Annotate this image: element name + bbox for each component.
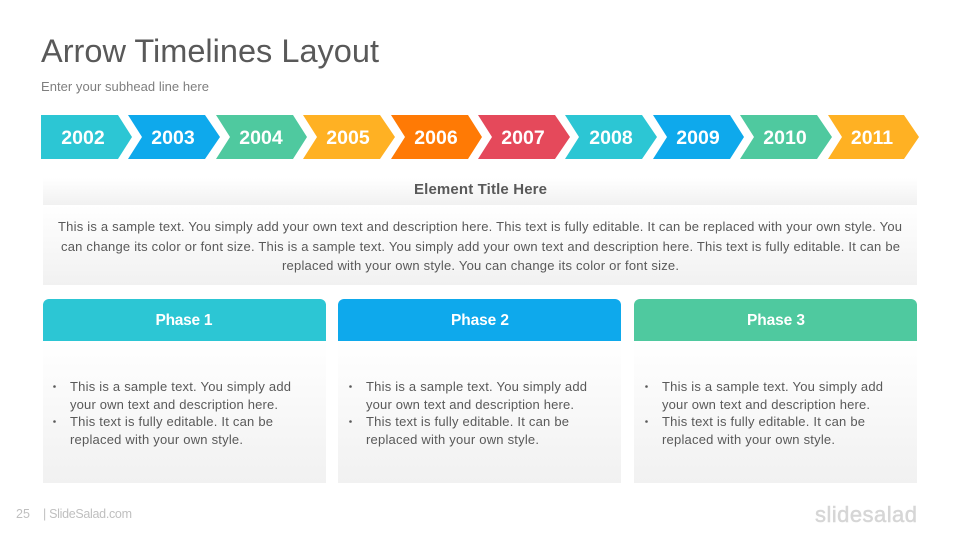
phase 1 body: This is a sample text. You simply add — [70, 379, 291, 394]
phase 1 body: replaced with your own style. — [70, 432, 243, 447]
phase 2 body: replaced with your own style. — [366, 432, 539, 447]
arrow: 2009: 2009 — [676, 127, 720, 149]
phase 2 header — [338, 299, 621, 341]
page number: 25 — [16, 507, 30, 521]
description text — [43, 205, 917, 285]
element title bar: Element Title Here — [414, 181, 547, 198]
phase 3 header — [634, 299, 917, 341]
arrow: 2005 — [303, 115, 395, 159]
phase 1 header: Phase 1 — [156, 312, 213, 329]
phase 1 body: This text is fully editable. It can be — [70, 414, 273, 429]
element title bar — [43, 178, 917, 205]
phase 2 body: your own text and description here. — [366, 397, 574, 412]
arrow: 2006: 2006 — [414, 127, 458, 149]
description text: replaced with your own style. You can change its color or font size. — [282, 258, 679, 273]
phase 2 body: This text is fully editable. It can be — [366, 414, 569, 429]
title: Arrow Timelines Layout — [41, 33, 379, 69]
footer source: | SlideSalad.com — [43, 507, 132, 521]
panel: phase 3 — [634, 299, 917, 483]
phase 3 header: Phase 3 — [747, 312, 805, 329]
phase 3 body: your own text and description here. — [662, 397, 870, 412]
phase 1 header — [43, 299, 326, 341]
phase 3 body: This text is fully editable. It can be — [662, 414, 865, 429]
arrow timeline — [41, 115, 919, 159]
arrow: 2007 — [478, 115, 570, 159]
phase 2 body — [338, 341, 621, 483]
panel: phase 2 — [338, 299, 621, 483]
arrow: 2004: 2004 — [239, 127, 283, 149]
arrow: 2008 — [565, 115, 657, 159]
phase 2 body: This is a sample text. You simply add — [366, 379, 587, 394]
phase 3 body: This is a sample text. You simply add — [662, 379, 883, 394]
phase 1 body — [43, 341, 326, 483]
arrow: 2009 — [653, 115, 744, 159]
arrow: 2005: 2005 — [326, 127, 370, 149]
description text: This is a sample text. You simply add your own text and description here. This text is fully editable. It can be replaced with your own style. You — [58, 219, 902, 234]
phase 1 body: your own text and description here. — [70, 397, 278, 412]
arrow: 2006 — [391, 115, 482, 159]
arrow: 2010: 2010 — [763, 127, 807, 149]
subhead: Enter your subhead line here — [41, 79, 209, 94]
arrow: 2011 — [828, 115, 919, 159]
phase 3 body — [634, 341, 917, 483]
arrow: 2007: 2007 — [501, 127, 545, 149]
arrow: 2010 — [740, 115, 832, 159]
arrow: 2011: 2011 — [851, 127, 893, 149]
arrow: 2003 — [128, 115, 220, 159]
arrow: 2003: 2003 — [151, 127, 195, 149]
arrow: 2002: 2002 — [61, 127, 105, 149]
phase 3 body: replaced with your own style. — [662, 432, 835, 447]
logo: slidesalad: slidesalad — [815, 502, 917, 527]
description text: can change its color or font size. This is a sample text. You simply add your own text and description here. This text is fully editable. It can be — [61, 239, 900, 254]
arrow: 2004 — [216, 115, 307, 159]
arrow: 2002 — [41, 115, 132, 159]
arrow: 2008: 2008 — [589, 127, 633, 149]
panel: phase 1 — [43, 299, 326, 483]
phase 2 header: Phase 2 — [451, 312, 509, 329]
panel: element description — [43, 178, 917, 285]
